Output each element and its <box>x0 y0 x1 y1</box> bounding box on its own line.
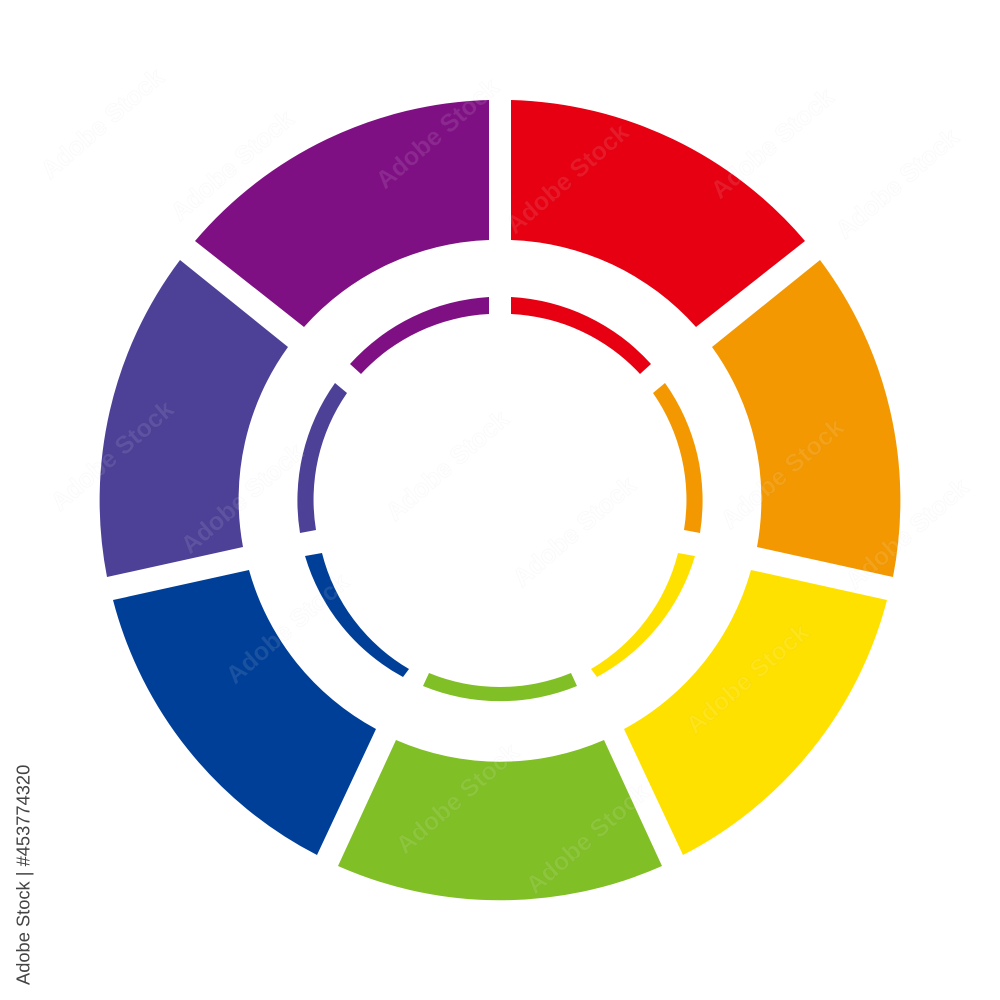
watermark pattern: Adobe Stock <box>508 471 641 593</box>
segment: orange <box>712 260 900 577</box>
segment: red <box>511 100 805 327</box>
watermark pattern: Adobe Stock <box>521 778 654 900</box>
watermark pattern: Adobe Stock <box>716 413 849 535</box>
vertical stock credit text: Adobe Stock | #453774320 <box>12 765 34 985</box>
arc: purple <box>350 297 489 374</box>
watermark pattern: Adobe Stock <box>501 118 634 240</box>
arc: yellow <box>591 553 695 677</box>
watermark pattern: Adobe Stock <box>391 738 524 860</box>
watermark pattern: Adobe Stock <box>46 395 179 517</box>
segment: green <box>338 740 662 900</box>
arc: green <box>423 673 577 701</box>
inner thin ring of seven arcs <box>297 297 703 701</box>
watermark pattern: Adobe Stock <box>166 105 299 227</box>
arc: orange <box>653 383 703 533</box>
arc: blue <box>305 553 409 677</box>
watermark pattern: Adobe Stock <box>176 438 309 560</box>
watermark pattern: Adobe Stock <box>681 618 814 740</box>
arc: indigo <box>297 383 347 533</box>
outer ring of seven segments <box>100 100 900 900</box>
watermark pattern: Adobe Stock <box>706 83 839 205</box>
watermark pattern: Adobe Stock <box>841 473 974 595</box>
segment: yellow <box>624 570 887 855</box>
segment: purple <box>195 100 489 327</box>
segment: indigo <box>100 260 288 577</box>
watermark pattern: Adobe Stock <box>831 123 964 245</box>
segment: blue <box>113 570 376 855</box>
watermark pattern: Adobe Stock <box>221 568 354 690</box>
watermark pattern: Adobe Stock <box>36 63 169 185</box>
watermark pattern <box>36 63 974 900</box>
watermark pattern: Adobe Stock <box>371 73 504 195</box>
watermark pattern: Adobe Stock <box>381 405 514 527</box>
arc: red <box>511 297 651 374</box>
